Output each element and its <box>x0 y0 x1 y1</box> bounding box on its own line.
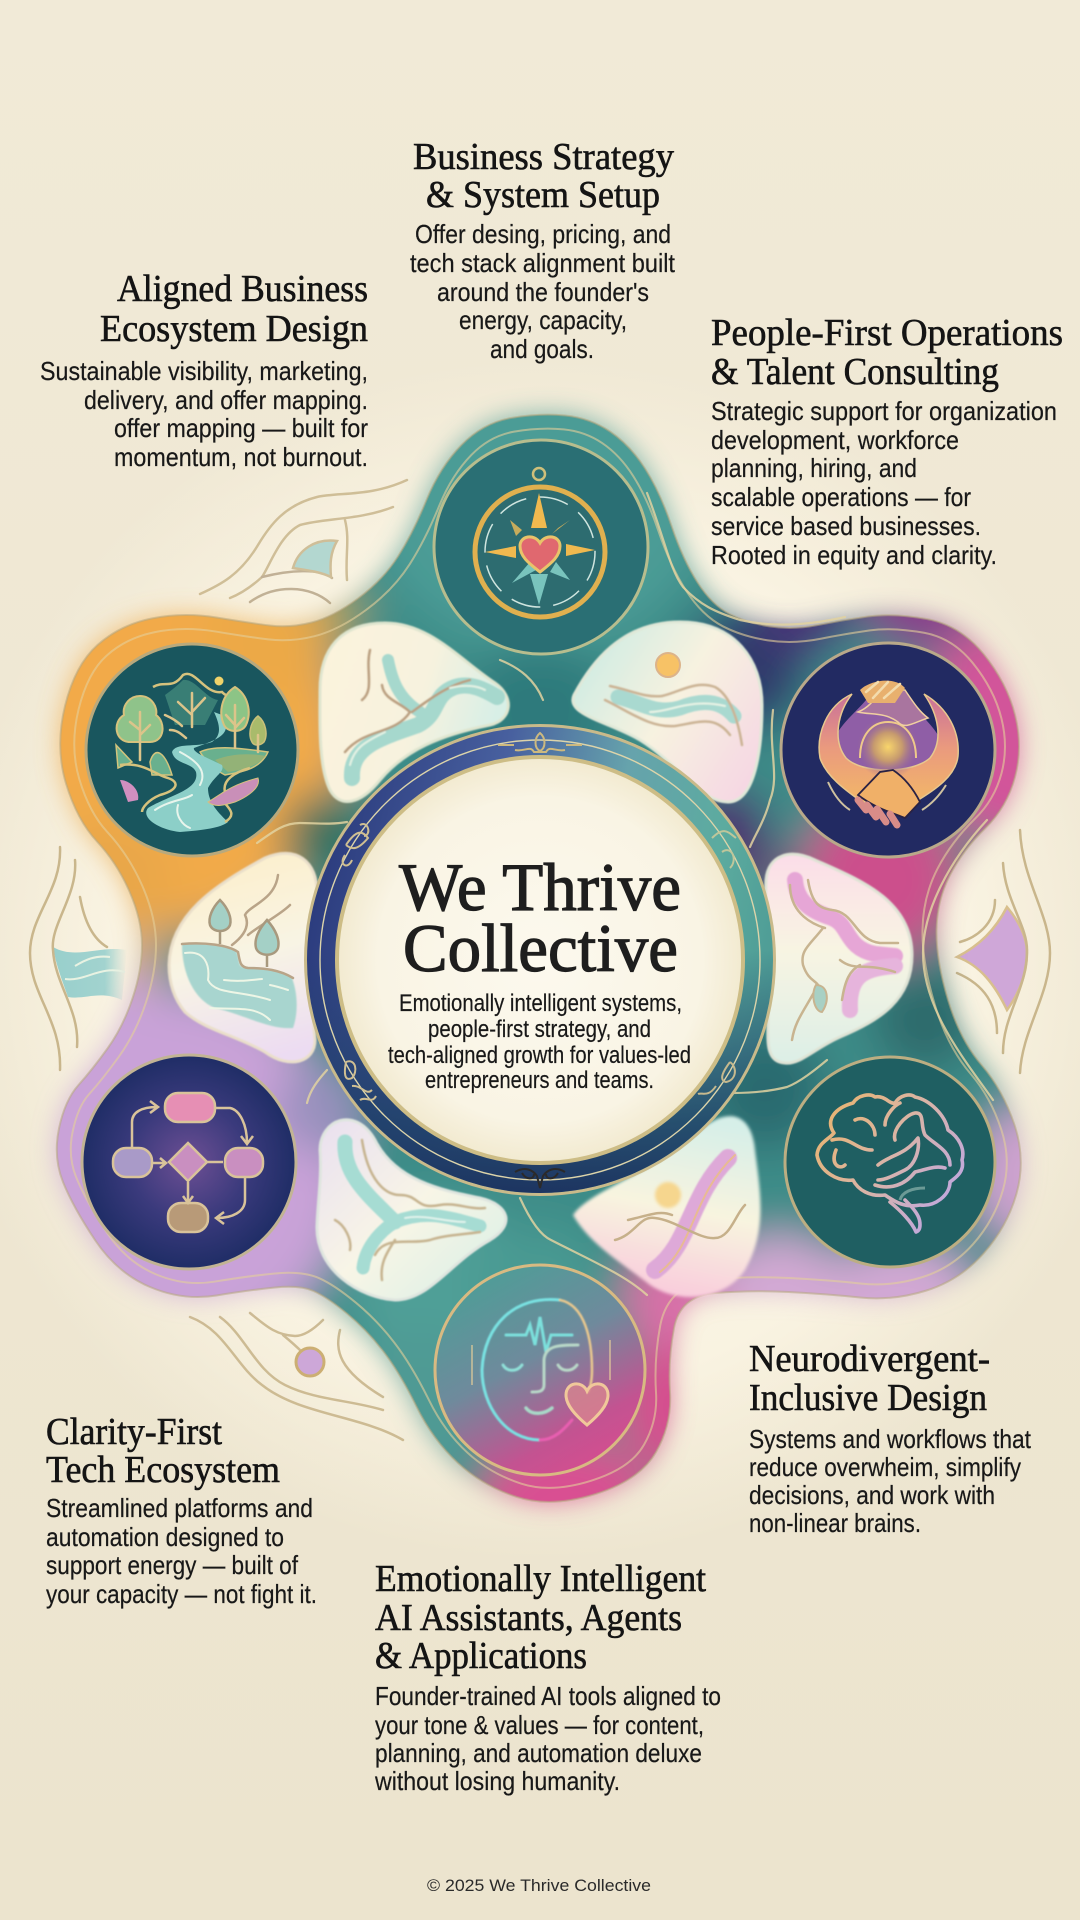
label: Emotionally Intelligent AI Assistants, Agents & Applications: without losing humanity. <box>374 1766 620 1796</box>
label: People-First Operations & Talent Consulting <box>711 312 1063 570</box>
label: Clarity-First Tech Ecosystem: Streamlined platforms and <box>46 1493 313 1523</box>
decorative form: far right <box>957 830 1050 1073</box>
label: Neurodivergent-Inclusive Design: Neurodivergent- <box>749 1338 990 1380</box>
label: Business Strategy & System Setup: & System Setup <box>426 174 660 216</box>
ornament: top flourish <box>498 733 582 752</box>
ecosystem blob with coloured lobes <box>43 396 1036 1520</box>
label: Clarity-First Tech Ecosystem: Tech Ecosystem <box>46 1449 280 1491</box>
label: Emotionally Intelligent AI Assistants, Agents & Applications: planning, and automation deluxe <box>375 1738 702 1768</box>
icon: compass with heart <box>434 440 648 654</box>
label: Business Strategy & System Setup <box>410 136 676 364</box>
label: Clarity-First Tech Ecosystem: Clarity-First <box>46 1411 222 1453</box>
label: Clarity-First Tech Ecosystem: your capacity — not fight it. <box>46 1579 317 1609</box>
icon: forest and river <box>86 644 298 856</box>
label: Emotionally Intelligent AI Assistants, Agents & Applications: Founder-trained AI tools aligned to <box>375 1681 721 1711</box>
label: Aligned Business Ecosystem Design: Sustainable visibility, marketing, <box>40 356 368 386</box>
centre title <box>399 849 681 986</box>
label: Neurodivergent-Inclusive Design <box>749 1338 1032 1538</box>
label: Aligned Business Ecosystem Design: delivery, and offer mapping. <box>84 385 368 415</box>
petal: left river and trees <box>169 853 317 1062</box>
label: Business Strategy & System Setup: and goals. <box>490 334 594 364</box>
label: People-First Operations & Talent Consulting: scalable operations — for <box>711 482 971 512</box>
label: Emotionally Intelligent AI Assistants, Agents & Applications: AI Assistants, Agents <box>375 1597 682 1639</box>
label: Emotionally Intelligent AI Assistants, Agents & Applications <box>374 1558 721 1796</box>
label: People-First Operations & Talent Consulting: & Talent Consulting <box>711 351 999 393</box>
central ring <box>304 724 776 1196</box>
label: Neurodivergent-Inclusive Design: decisions, and work with <box>749 1480 995 1510</box>
label: Aligned Business Ecosystem Design: offer mapping — built for <box>114 413 368 443</box>
centre description: tech-aligned growth for values-led <box>388 1042 691 1069</box>
icon: calm face with heart <box>435 1265 645 1475</box>
centre description <box>388 990 691 1094</box>
label: Clarity-First Tech Ecosystem: support energy — built of <box>46 1550 299 1580</box>
centre title: We Thrive <box>399 849 681 925</box>
label: People-First Operations & Talent Consulting: Rooted in equity and clarity. <box>711 540 997 570</box>
label: People-First Operations & Talent Consulting: planning, hiring, and <box>711 453 917 483</box>
icon: brain <box>785 1057 995 1267</box>
label: Aligned Business Ecosystem Design: Ecosystem Design <box>100 308 368 350</box>
label: People-First Operations & Talent Consulting: development, workforce <box>711 425 959 455</box>
label: Business Strategy & System Setup: tech stack alignment built <box>410 248 676 278</box>
icon: joined hands <box>781 643 995 857</box>
decorative stream: far left <box>30 847 127 1070</box>
label: Aligned Business Ecosystem Design: Aligned Business <box>117 268 368 310</box>
label: Aligned Business Ecosystem Design <box>40 268 368 472</box>
label: Business Strategy & System Setup: Business Strategy <box>413 136 674 178</box>
centre description: Emotionally intelligent systems, <box>399 990 682 1017</box>
petal: lower right sun and ribbon <box>573 1116 761 1297</box>
petal: lower left river <box>317 1120 506 1300</box>
label: People-First Operations & Talent Consulting: People-First Operations <box>711 312 1063 354</box>
ring ornaments <box>343 824 736 1188</box>
decorative swirl: top left <box>200 480 407 603</box>
label: Aligned Business Ecosystem Design: momentum, not burnout. <box>114 442 368 472</box>
icon: workflow diagram <box>82 1055 296 1269</box>
centre title: Collective <box>403 910 678 986</box>
label: Neurodivergent-Inclusive Design: Inclusive Design <box>749 1377 987 1419</box>
petal: upper left river <box>320 623 508 801</box>
label: Neurodivergent-Inclusive Design: non-linear brains. <box>749 1508 921 1538</box>
label: Emotionally Intelligent AI Assistants, Agents & Applications: your tone & values — for content, <box>375 1710 704 1740</box>
label: Business Strategy & System Setup: Offer desing, pricing, and <box>415 219 671 249</box>
label: Neurodivergent-Inclusive Design: Systems and workflows that <box>749 1424 1032 1454</box>
label: Business Strategy & System Setup: around the founder's <box>437 277 649 307</box>
centre description: entrepreneurs and teams. <box>425 1067 654 1094</box>
label: Business Strategy & System Setup: energy, capacity, <box>459 305 627 335</box>
footer copyright: © 2025 We Thrive Collective <box>427 1876 651 1895</box>
label: Clarity-First Tech Ecosystem <box>46 1411 317 1609</box>
decorative swirl: lower left <box>190 1313 403 1440</box>
petal: right pink ribbon <box>765 854 912 1063</box>
petal: upper right sun and wave <box>573 622 762 802</box>
label: Emotionally Intelligent AI Assistants, Agents & Applications: & Applications <box>375 1635 587 1677</box>
centre description: people-first strategy, and <box>428 1016 651 1043</box>
label: People-First Operations & Talent Consulting: service based businesses. <box>711 511 981 541</box>
label: Neurodivergent-Inclusive Design: reduce overwheim, simplify <box>749 1452 1021 1482</box>
label: Emotionally Intelligent AI Assistants, Agents & Applications: Emotionally Intelligent <box>375 1558 706 1600</box>
label: Clarity-First Tech Ecosystem: automation designed to <box>46 1522 284 1552</box>
